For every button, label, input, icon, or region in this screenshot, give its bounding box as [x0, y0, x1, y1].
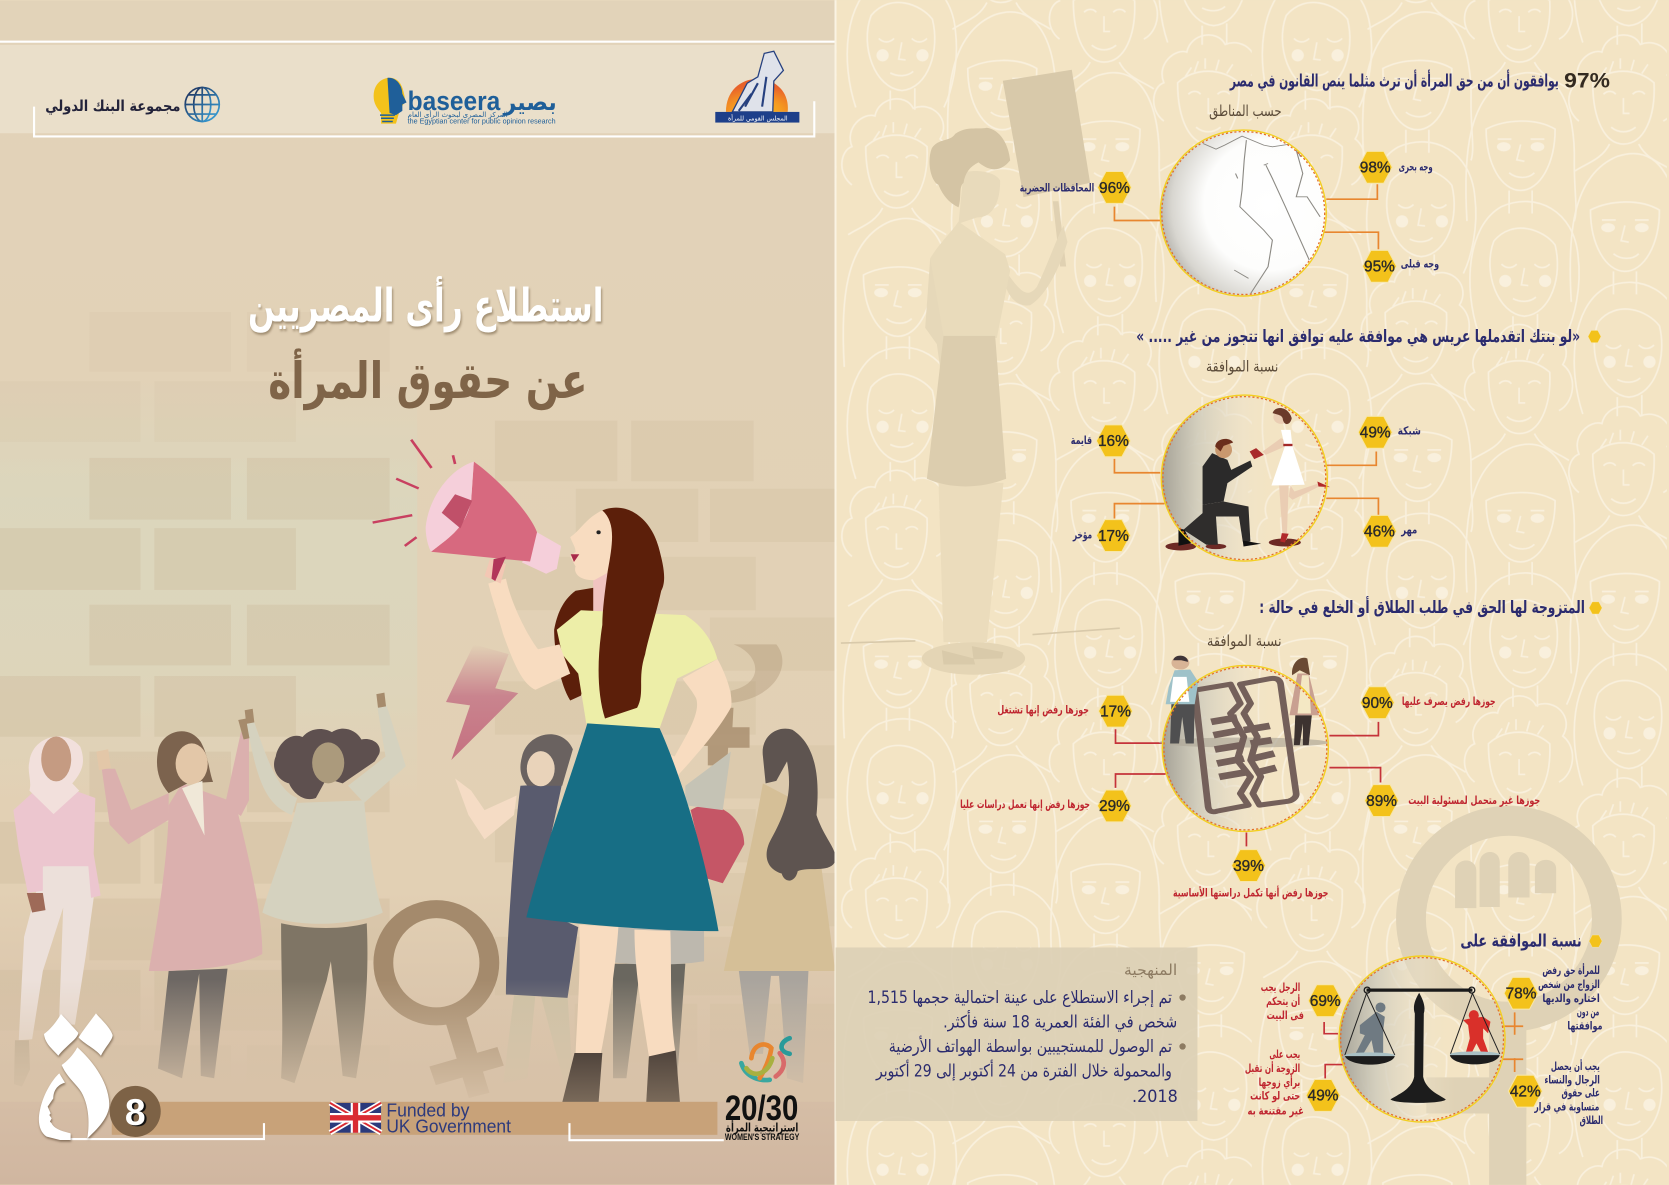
header band — [0, 41, 834, 136]
stat: upper Egypt: وجه قبلى — [1401, 257, 1439, 270]
stat: qayma: 16% — [1098, 433, 1129, 450]
stat: equal divorce rights: على حقوق — [1561, 1086, 1600, 1099]
stat: urban governorates: المحافظات الحضرية — [1020, 182, 1094, 195]
logo: world bank group: مجموعة البنك الدولي — [45, 97, 180, 115]
logo: baseera: بصير — [503, 88, 557, 116]
stat: lower Egypt: وجه بحرى — [1399, 160, 1433, 173]
bullet — [1588, 330, 1601, 343]
overlay: floor fade — [14, 988, 807, 1098]
face — [570, 510, 614, 580]
logo: 2030 women's strategy: 20/30 — [725, 1089, 798, 1128]
stat: deferred dowry: مؤخر — [1072, 529, 1092, 542]
section: inheritance — [1020, 68, 1610, 296]
stat: qayma: قايمة — [1071, 434, 1092, 447]
stat: shabka: 49% — [1360, 425, 1391, 442]
stat: shabka — [1358, 416, 1421, 448]
stat: refuses higher studies: جوزها رفض إنها تعمل دراسات عليا — [960, 798, 1090, 811]
text: funded by — [388, 1103, 511, 1132]
stat: right to refuse marriage: 78% — [1506, 986, 1537, 1003]
skirt — [526, 723, 719, 931]
stat: upper Egypt — [1362, 250, 1439, 282]
logo: 2030 women's strategy — [725, 1038, 799, 1142]
stat: dowry: 46% — [1364, 524, 1395, 541]
legs — [576, 925, 676, 1056]
stat: right to refuse marriage — [1504, 963, 1603, 1032]
stat: husband refuses to spend — [1360, 687, 1496, 719]
title: استطلاع رأى المصريين — [248, 276, 604, 333]
bullets — [1179, 994, 1186, 1050]
figure: woman seen from behind — [245, 693, 406, 1083]
heading: 97% — [1564, 68, 1610, 92]
connectors — [1116, 722, 1381, 846]
stat: husband refuses to spend: جوزها رفض يصرف عليها — [1402, 695, 1496, 708]
logo: 2030 women's strategy: WOMEN'S STRATEGY — [725, 1132, 799, 1142]
stat: dowry — [1362, 515, 1417, 547]
figure: woman behind in grey — [605, 752, 731, 1078]
subheading: نسبة الموافقة — [1207, 632, 1282, 650]
stat: equal divorce rights: الرجال والنساء — [1544, 1074, 1600, 1087]
icon: sound rays — [373, 440, 455, 546]
stat: refuses higher studies — [960, 790, 1131, 822]
text: funded by: Funded by — [386, 1101, 469, 1121]
stat: right to refuse marriage: للمرأة حق رفض — [1542, 963, 1600, 977]
section: attitudes — [1245, 931, 1603, 1127]
logo: national council for women: المجلس القومي للمرأة — [728, 113, 788, 122]
stat: man should control: فى البيت — [1267, 1009, 1304, 1022]
body text: شخص في الفئة العمرية 18 سنة فأكثر. — [943, 1009, 1177, 1032]
text: funded by: UK Government — [386, 1117, 511, 1137]
heading: المنهجية — [1124, 961, 1177, 979]
stat: deferred dowry — [1072, 520, 1130, 552]
rear hair — [554, 588, 594, 700]
boots — [562, 1051, 680, 1103]
bullet — [1589, 602, 1602, 614]
logo: baseera: baseera — [408, 86, 500, 116]
stat: upper Egypt: 95% — [1364, 259, 1395, 276]
stat: equal divorce rights: متساوية في قرار — [1534, 1100, 1599, 1113]
stat: urban governorates — [1020, 172, 1131, 203]
connectors — [1324, 1022, 1344, 1078]
illustration: torn contract — [1159, 656, 1329, 831]
illustration: crowd of women — [13, 644, 836, 1095]
stat: right to refuse marriage: اختاره والديها — [1542, 992, 1600, 1005]
icon: page number 8: 8 — [125, 1091, 146, 1133]
logo: baseera — [374, 78, 557, 126]
figure: woman in tan coat — [691, 729, 836, 1083]
ghost icon: large female symbol — [1411, 821, 1607, 1185]
neck — [593, 573, 608, 612]
stat: refuses her working: جوزها رفض إنها تشتغل — [997, 703, 1089, 716]
stat: equal divorce rights: 42% — [1510, 1083, 1541, 1100]
stat: wife must accept — [1245, 1048, 1340, 1118]
stat: man should control: الرجل يجب — [1261, 981, 1300, 994]
front hair — [599, 508, 664, 719]
section: marriage proposal — [1071, 327, 1601, 561]
heading: نسبة الموافقة على — [1460, 931, 1582, 951]
stat: wife must accept: برأي زوجها — [1259, 1075, 1300, 1089]
panel: methodology — [836, 947, 1197, 1121]
connectors — [1114, 184, 1378, 249]
woman — [1289, 658, 1319, 745]
stat: refuses her working — [997, 695, 1133, 727]
stat: wife must accept: غير مقتنعة به — [1247, 1105, 1304, 1118]
stat: equal divorce rights: يجب أن يحصل — [1551, 1059, 1600, 1073]
body text: تم إجراء الاستطلاع على عينة احتمالية حجمها 1,515 — [867, 988, 1172, 1008]
icon: map of Egypt — [1160, 130, 1326, 296]
figure: woman in hijab — [13, 736, 101, 1087]
stat: irresponsible: جوزها غير متحمل لمسئولية البيت — [1408, 794, 1540, 807]
stat: man should control: 69% — [1310, 993, 1341, 1010]
stat: refuses basic education: جوزها رفض أنها تكمل دراستها الأساسية — [1173, 885, 1328, 899]
arm raised — [488, 579, 570, 690]
stat: husband refuses to spend: 90% — [1362, 695, 1393, 712]
stat: man should control — [1261, 981, 1342, 1022]
stat: wife must accept: حتى لو كانت — [1250, 1090, 1300, 1103]
stat: refuses basic education: 39% — [1233, 858, 1264, 875]
stat: refuses basic education — [1173, 850, 1328, 899]
icon: background female symbol — [701, 644, 782, 765]
panel: survey results — [834, 0, 1669, 1185]
logo: baseera: المركز المصرى لبحوث الرأى العام — [408, 110, 508, 119]
subheading: حسب المناطق — [1209, 102, 1282, 120]
icon: lightning bolt — [446, 644, 518, 760]
icon: female symbol — [383, 909, 501, 1095]
figure: woman in pink coat — [96, 719, 262, 1078]
stat: right to refuse marriage: من دون — [1577, 1006, 1599, 1019]
stat: equal divorce rights — [1508, 1059, 1603, 1127]
body text: والمحمولة خلال الفترة من 24 أكتوبر إلى 29 أكتوبر — [875, 1059, 1172, 1081]
ghost figure: woman holding sign — [922, 70, 1090, 675]
footer bar — [69, 1102, 724, 1140]
stat: lower Egypt: 98% — [1360, 160, 1391, 177]
stat: shabka: شبكة — [1398, 424, 1421, 437]
stat: right to refuse marriage: موافقتها — [1567, 1019, 1603, 1032]
arm on hip — [671, 659, 732, 775]
body text: 2018. — [1132, 1087, 1178, 1107]
stat: man should control: أن يتحكم — [1266, 994, 1300, 1008]
stat: lower Egypt — [1358, 151, 1433, 183]
logo: calligraphic mark with woman profile — [39, 1013, 113, 1140]
stat: irresponsible: 89% — [1366, 793, 1397, 810]
stat: urban governorates: 96% — [1099, 180, 1130, 197]
section: divorce — [960, 596, 1602, 899]
logo: baseera: the Egyptian center for public opinion research — [408, 119, 556, 126]
illustration: main woman with megaphone — [373, 440, 732, 1103]
stat: dowry: مهر — [1401, 523, 1417, 536]
logo: national council for women — [715, 51, 799, 123]
shirt — [557, 610, 717, 728]
icon: megaphone — [426, 462, 561, 583]
stat: refuses her working: 17% — [1100, 704, 1131, 721]
title: عن حقوق المرأة — [268, 348, 588, 411]
man — [1166, 656, 1198, 744]
stat: wife must accept: 49% — [1308, 1088, 1339, 1105]
stat: wife must accept: يجب على — [1269, 1048, 1300, 1061]
icon: globe — [185, 87, 219, 121]
connectors — [1114, 451, 1378, 519]
ground line — [841, 628, 1120, 643]
background: line-art faces — [837, 0, 1669, 1185]
icon: UK flag — [330, 1103, 381, 1133]
stat: irresponsible — [1365, 785, 1540, 817]
logo: 2030 women's strategy: استراتيجية المرأة — [726, 1120, 798, 1136]
stat: deferred dowry: 17% — [1098, 528, 1129, 545]
stat: qayma — [1071, 425, 1130, 457]
icon: page number 8 — [110, 1086, 161, 1137]
title — [248, 276, 604, 411]
bullet — [1589, 935, 1602, 947]
illustration: scales — [1339, 956, 1505, 1122]
stat: refuses higher studies: 29% — [1099, 798, 1130, 815]
panel: cover page — [0, 0, 836, 1185]
body text: تم الوصول للمستجيبين بواسطة الهواتف الأرضية — [889, 1035, 1172, 1057]
illustration: proposal — [1161, 395, 1330, 561]
subheading: نسبة الموافقة — [1206, 358, 1278, 376]
logo: world bank group — [45, 87, 219, 121]
icon: calligraphic ribbon — [741, 1038, 790, 1080]
stat: wife must accept: الزوجة أن تقبل — [1245, 1061, 1300, 1075]
body text — [867, 988, 1178, 1107]
figure: woman in dark dress — [456, 734, 578, 1028]
stat: right to refuse marriage: الزواج من شخص — [1538, 978, 1600, 992]
stat: equal divorce rights: الطلاق — [1580, 1114, 1603, 1127]
